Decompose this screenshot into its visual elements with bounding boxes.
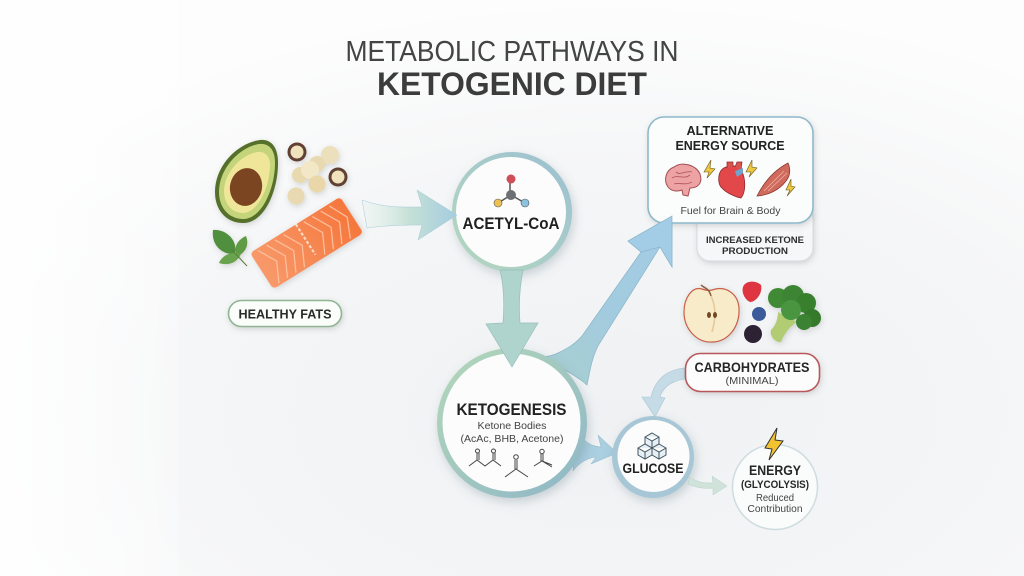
icon: lightning bolt bbox=[746, 160, 757, 177]
label: increased ketone production: INCREASED KETONE bbox=[706, 235, 804, 246]
arrow: ketogenesis to alternative energy bbox=[520, 216, 672, 385]
icon: sugar cubes bbox=[638, 433, 666, 459]
node: energy bbox=[732, 428, 818, 530]
icon: blackberry bbox=[744, 325, 762, 343]
icon: heart bbox=[719, 162, 745, 198]
node: energy: (GLYCOLYSIS) bbox=[741, 479, 809, 491]
arrow: ketogenesis to glucose bbox=[573, 430, 617, 471]
icon: salmon fillet bbox=[250, 197, 363, 289]
icon: ketone structures bbox=[469, 449, 552, 477]
icon: basil leaves bbox=[213, 230, 247, 266]
icon: apple half bbox=[684, 285, 739, 342]
node: acetyl-CoA bbox=[452, 152, 572, 272]
panel: alternative energy source: ALTERNATIVE bbox=[686, 124, 774, 138]
title bbox=[346, 36, 678, 102]
node: energy: Reduced bbox=[756, 493, 794, 504]
title: KETOGENIC DIET bbox=[377, 66, 647, 102]
arrow: carbohydrates to glucose bbox=[642, 368, 685, 417]
icon: avocado bbox=[215, 140, 278, 223]
label: healthy fats: HEALTHY FATS bbox=[238, 306, 332, 322]
node: acetyl-CoA: ACETYL-CoA bbox=[462, 214, 560, 233]
icon: molecule bbox=[494, 174, 529, 207]
label: carbohydrates: (MINIMAL) bbox=[726, 375, 778, 387]
icon: blueberry bbox=[752, 307, 766, 321]
node: ketogenesis: (AcAc, BHB, Acetone) bbox=[460, 433, 564, 445]
icon: lightning bolt bbox=[765, 428, 783, 460]
icon: avocado pit bbox=[226, 165, 266, 209]
label: healthy fats bbox=[228, 300, 342, 326]
icon: broccoli bbox=[768, 285, 821, 342]
node: glucose bbox=[612, 416, 694, 498]
label: increased ketone production: PRODUCTION bbox=[722, 246, 788, 257]
title: METABOLIC PATHWAYS IN bbox=[346, 36, 678, 68]
icon: muscle bbox=[757, 163, 790, 196]
arrow: fats to acetyl-CoA bbox=[362, 190, 457, 240]
node: glucose: GLUCOSE bbox=[622, 460, 684, 476]
label: carbohydrates: CARBOHYDRATES bbox=[694, 359, 810, 375]
arrow: glucose to energy bbox=[688, 476, 727, 495]
label: increased ketone production bbox=[697, 205, 813, 261]
label: carbohydrates bbox=[686, 354, 820, 392]
node: energy: Contribution bbox=[748, 504, 802, 515]
node: ketogenesis: Ketone Bodies bbox=[478, 420, 546, 432]
node: ketogenesis: KETOGENESIS bbox=[456, 401, 566, 419]
icon: macadamia nuts bbox=[288, 142, 348, 204]
panel: alternative energy source: Fuel for Brain & Body bbox=[680, 205, 781, 217]
node: ketogenesis bbox=[437, 348, 587, 498]
icon: raspberry bbox=[743, 282, 761, 302]
node: energy: ENERGY bbox=[749, 463, 801, 478]
icon: lightning bolt bbox=[704, 160, 715, 178]
panel: alternative energy source bbox=[648, 117, 813, 223]
icon: brain bbox=[666, 164, 701, 196]
icon: lightning bolt bbox=[786, 179, 795, 196]
arrow head over panel bbox=[628, 216, 672, 267]
arrow: acetyl-CoA to ketogenesis bbox=[486, 270, 538, 367]
panel: alternative energy source: ENERGY SOURCE bbox=[676, 139, 784, 153]
